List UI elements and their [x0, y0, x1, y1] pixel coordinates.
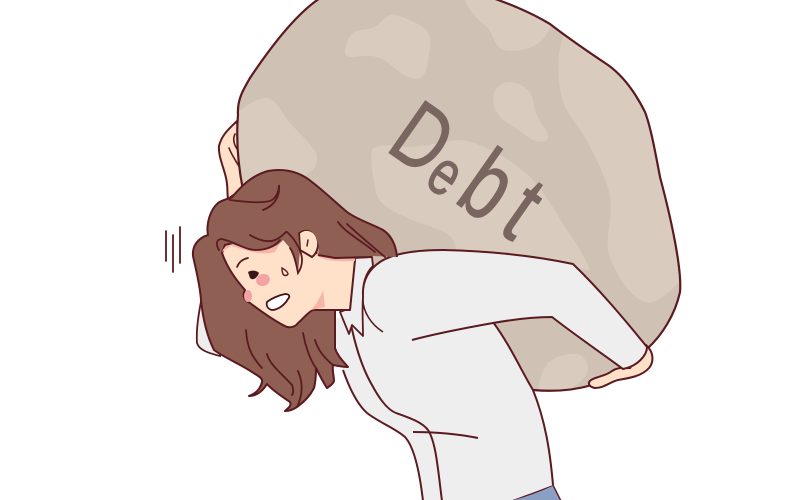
- shirt: back strip: [330, 300, 553, 500]
- neck shadow: top: [316, 250, 355, 261]
- boulder: [234, 0, 690, 391]
- shirt: sleeve: [363, 250, 647, 369]
- neck shadow: [311, 290, 325, 310]
- sweat drop: [282, 268, 288, 276]
- boulder label: Debt: e: [415, 136, 478, 210]
- boulder label: Debt: b: [440, 130, 536, 242]
- icon: supporting hand: [589, 345, 652, 388]
- icon: raised hand: [219, 121, 246, 199]
- hair: top: [207, 170, 397, 407]
- shirt: under hair back panel: [197, 292, 220, 356]
- jeans: [507, 485, 561, 500]
- hair: back: [193, 235, 348, 411]
- hair strands: [217, 185, 385, 273]
- icon: motion lines: [166, 227, 180, 272]
- face and neck: [222, 232, 355, 327]
- ear: [299, 230, 318, 257]
- illustration: woman carrying a debt boulder: [165, 0, 682, 500]
- eye: [248, 271, 259, 279]
- boulder highlights: [234, 0, 690, 390]
- nose blush: [244, 290, 252, 302]
- boulder label: Debt: t: [484, 159, 563, 260]
- face: forehead shadow: [222, 240, 280, 253]
- boulder label: Debt: D: [373, 82, 472, 195]
- mouth: [267, 294, 289, 310]
- cheek blush: [254, 272, 272, 288]
- shirt: [330, 250, 647, 500]
- eyebrow: [237, 258, 248, 267]
- collar: [340, 257, 373, 336]
